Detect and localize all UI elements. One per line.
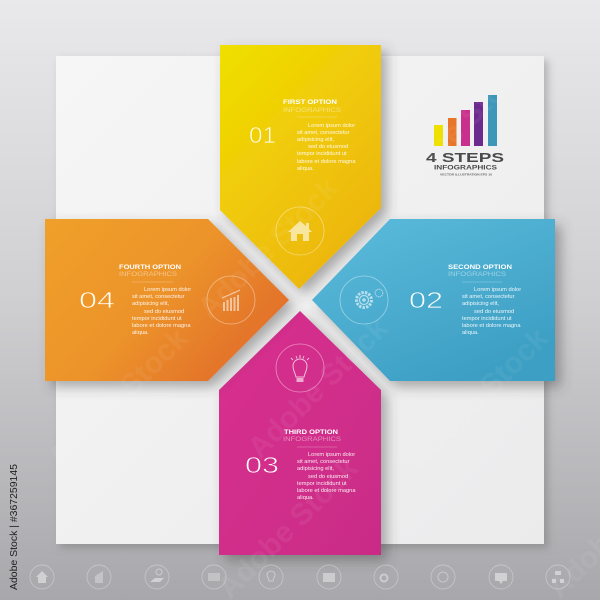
body text: Lorem ipsum dolor — [144, 287, 191, 293]
body text: aliqua. — [297, 166, 314, 172]
subheading: INFOGRAPHICS — [283, 436, 341, 443]
body text: Lorem ipsum dolor — [308, 123, 355, 129]
icon: growth chart — [207, 276, 255, 324]
logo: 4 steps infographics — [426, 95, 504, 176]
body text: Lorem ipsum dolor — [308, 452, 355, 458]
heading: second option: SECOND OPTION — [448, 264, 513, 271]
icon: speech bubble — [489, 565, 513, 589]
number 01: 01 — [249, 122, 276, 148]
panel: third option — [219, 311, 381, 555]
icon: gears — [340, 276, 388, 324]
body text: aliqua. — [297, 495, 314, 501]
icon: clock — [431, 565, 455, 589]
number 03: 03 — [245, 452, 279, 478]
watermarks: Adobe Stock — [42, 322, 195, 475]
heading: fourth option: FOURTH OPTION — [119, 264, 182, 271]
divider — [462, 281, 502, 283]
panel: fourth option — [45, 219, 289, 381]
orange arrow shape — [45, 219, 289, 381]
body text: sed do eiusmod — [308, 144, 348, 150]
icon: gear — [374, 565, 398, 589]
watermarks: Adobe Stock — [242, 312, 395, 465]
body text: sit amet, consectetur — [297, 130, 350, 136]
divider — [132, 281, 173, 283]
divider — [297, 116, 337, 118]
logo caption: VECTOR ILLUSTRATION EPS 10 — [440, 172, 492, 176]
body text: labore et dolore magna — [297, 488, 356, 494]
yellow arrow shape — [220, 45, 381, 289]
body text: labore et dolore magna — [462, 323, 521, 329]
body text: adipisicing elit, — [462, 301, 499, 307]
heading: first option: FIRST OPTION — [283, 99, 338, 106]
logo title: 4 STEPS — [426, 151, 504, 165]
body text: tempor incididunt ut — [132, 316, 182, 322]
body text: sed do eiusmod — [308, 474, 348, 480]
icon: envelope — [202, 565, 226, 589]
watermarks: Adobe Stock — [402, 322, 555, 475]
icon: chart — [87, 565, 111, 589]
body text: aliqua. — [132, 330, 149, 336]
icon: house — [276, 207, 324, 255]
bar chart — [434, 95, 497, 146]
body text: sed do eiusmod — [144, 309, 184, 315]
icon: home — [30, 565, 54, 589]
heading: third option: THIRD OPTION — [284, 429, 339, 436]
body text: aliqua. — [462, 330, 479, 336]
body text: tempor incididunt ut — [297, 151, 347, 157]
panel: first option — [220, 45, 381, 289]
icon: bulb — [259, 565, 283, 589]
watermarks: Adobe Stock — [382, 52, 535, 205]
body text: adipisicing elit, — [132, 301, 169, 307]
body text: sit amet, consectetur — [132, 294, 185, 300]
body text: adipisicing elit, — [297, 466, 334, 472]
body text: tempor incididunt ut — [462, 316, 512, 322]
white square panel — [56, 56, 544, 544]
body text: tempor incididunt ut — [297, 481, 347, 487]
number 02: 02 — [409, 287, 443, 313]
magenta arrow shape — [219, 311, 381, 555]
blue arrow shape — [312, 219, 555, 381]
body text: Lorem ipsum dolor — [474, 287, 521, 293]
watermarks: Adobe Stock — [52, 42, 205, 195]
subheading: INFOGRAPHICS — [448, 271, 506, 278]
logo subtitle: INFOGRAPHICS — [434, 164, 498, 172]
divider — [297, 446, 337, 448]
icon: camera — [317, 565, 341, 589]
body text: sed do eiusmod — [474, 309, 514, 315]
bottom icon row — [30, 565, 570, 589]
body text: adipisicing elit, — [297, 137, 334, 143]
panel: second option — [312, 219, 555, 381]
icon: network — [546, 565, 570, 589]
subheading: INFOGRAPHICS — [119, 271, 177, 278]
vertical stock caption: Adobe Stock | #367259145 — [8, 464, 20, 590]
body text: sit amet, consectetur — [297, 459, 350, 465]
icon: light bulb — [276, 344, 324, 392]
subheading: INFOGRAPHICS — [283, 107, 341, 114]
body text: labore et dolore magna — [132, 323, 191, 329]
body text: labore et dolore magna — [297, 159, 356, 165]
body text: sit amet, consectetur — [462, 294, 515, 300]
icon: hand with coin — [145, 565, 169, 589]
watermarks: Adobe Stock — [192, 172, 345, 325]
number 04: 04 — [79, 287, 115, 313]
